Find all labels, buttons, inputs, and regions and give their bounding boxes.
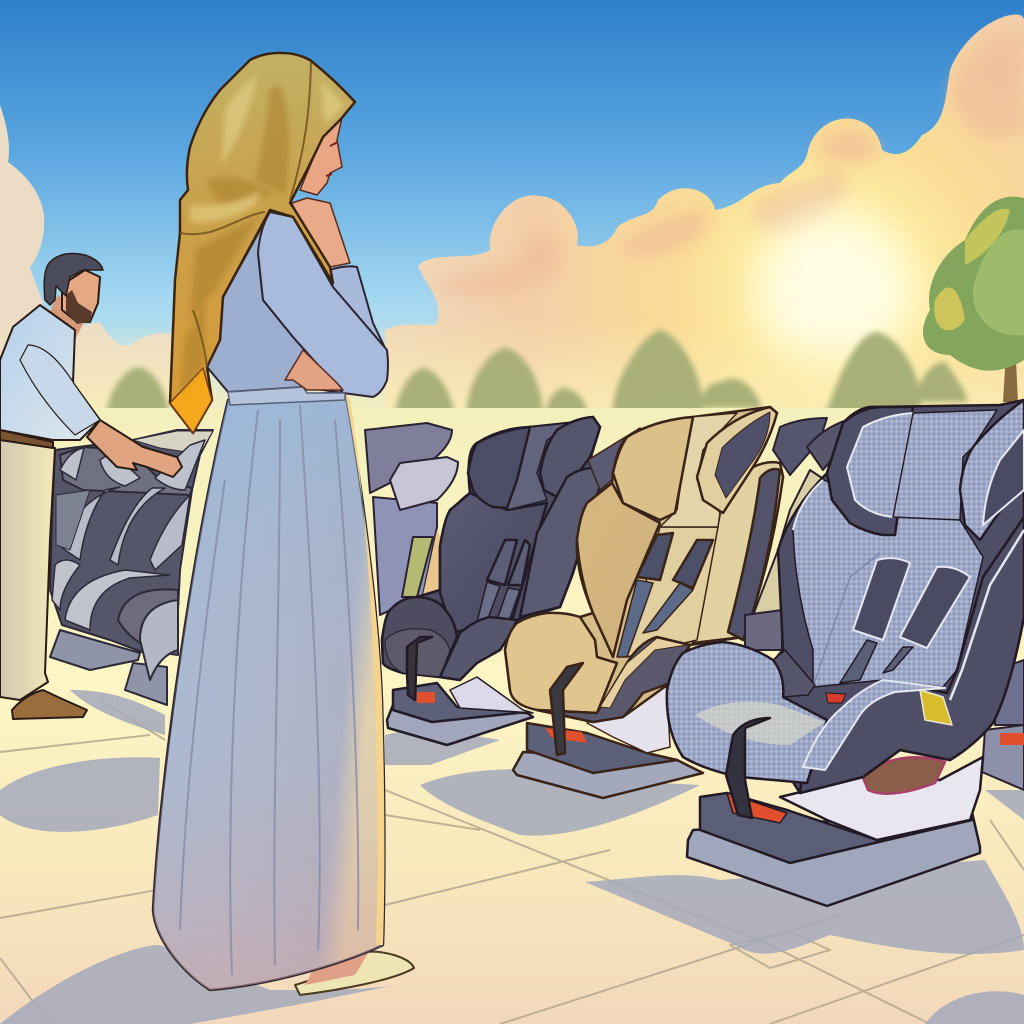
man: hair bbox=[44, 254, 103, 305]
tan seat: left bolster bbox=[577, 483, 660, 657]
man: shirt bbox=[0, 305, 100, 440]
ground bbox=[0, 408, 1024, 1024]
large seat: right bolster bbox=[800, 517, 1024, 793]
woman bbox=[153, 53, 414, 995]
paving lines bbox=[0, 700, 1024, 1024]
woman: raised forearm bbox=[330, 266, 387, 352]
dark seat: shoulder pads bbox=[487, 540, 517, 585]
woman: rim light bbox=[345, 392, 384, 945]
large seat: red panel bbox=[727, 793, 787, 823]
large seat: back fabric base bbox=[793, 480, 983, 687]
large seat: crotch strap bbox=[726, 718, 770, 818]
large seat: thigh bolster bbox=[803, 680, 945, 770]
woman: scarf shading bbox=[180, 85, 289, 395]
large seat: headrest centre bbox=[893, 410, 997, 520]
tan seat: straps bbox=[617, 580, 653, 657]
large seat: undercarriage bbox=[862, 757, 945, 794]
woman: sleeve bbox=[258, 212, 388, 397]
woman: skirt bbox=[153, 392, 384, 990]
tan seat: silhouette bbox=[505, 407, 783, 722]
large seat: wedge bbox=[780, 757, 983, 840]
clouds: sunset bank behind sun bbox=[385, 14, 1024, 430]
dark seat: wedge bbox=[450, 677, 533, 713]
large seat: shell backing bbox=[740, 400, 1024, 793]
left row: middle stripes bbox=[62, 487, 190, 570]
left row: lower stripes bbox=[52, 560, 170, 630]
tan seat: wedge bbox=[587, 687, 670, 753]
woman: eye and lip bbox=[326, 142, 338, 176]
car seat: large foreground bbox=[667, 400, 1024, 906]
woman: shoe bbox=[295, 952, 414, 995]
left row: headrest rolls bbox=[60, 447, 192, 495]
dark seat: headrest wing bbox=[540, 417, 600, 497]
sky bbox=[0, 0, 1024, 430]
tan seat: right bolster dark bbox=[728, 469, 780, 640]
man: beard bbox=[66, 290, 92, 324]
large seat: left shoulder pad bbox=[853, 558, 910, 640]
left row: front base bbox=[125, 663, 167, 705]
sun glow bbox=[755, 210, 915, 370]
large seat: side fabric edge bbox=[793, 480, 823, 530]
man: sleeve fold bbox=[20, 345, 100, 435]
tan seat: base plate bbox=[513, 752, 703, 798]
dark seat: silhouette bbox=[382, 417, 603, 680]
woman: hand under elbow bbox=[285, 350, 343, 390]
clouds: left bank bbox=[0, 105, 175, 430]
dark seat: belt bbox=[407, 637, 432, 700]
tan seat: headrest left bbox=[613, 417, 693, 520]
man: trousers bbox=[0, 438, 55, 700]
tan seat: right bolster outer bbox=[693, 462, 783, 643]
large seat: cushion bbox=[667, 642, 827, 783]
large seat: straps bbox=[840, 640, 877, 683]
large seat: headrest wing bbox=[960, 400, 1024, 540]
woman: face bbox=[300, 113, 343, 195]
woman: dress folds bbox=[180, 405, 358, 975]
dark seat: front bolster bbox=[440, 617, 517, 680]
tan seat: belt bbox=[550, 663, 583, 755]
woman: scarf tip bbox=[170, 368, 212, 433]
distant haze bbox=[0, 320, 1024, 430]
left row: rear base bbox=[50, 630, 140, 670]
tan seat: shoulder pads bbox=[637, 533, 673, 580]
car seat: dark bbox=[382, 417, 603, 745]
large seat: headrest left bbox=[827, 407, 913, 535]
cloud highlights bbox=[430, 32, 1024, 295]
man: shoes bbox=[12, 690, 87, 719]
car seat: behind woman bbox=[365, 423, 458, 615]
man: neck bbox=[48, 295, 85, 340]
tan seat: thigh bolster bbox=[537, 637, 690, 722]
tan seat: headrest wing bbox=[697, 407, 777, 513]
large seat: right shoulder pad bbox=[900, 567, 970, 648]
woman: hand at chin bbox=[292, 198, 350, 267]
large seat: seam bbox=[813, 553, 880, 687]
tan seat: behind headrest bbox=[588, 428, 660, 490]
large seat: warning label bbox=[920, 690, 952, 725]
large seat: side panel bbox=[773, 650, 815, 697]
car seat behind large seat bbox=[745, 417, 1024, 790]
dark seat: headrest left bbox=[468, 427, 530, 508]
dark seat: back bbox=[440, 493, 547, 633]
dark seat: base plate bbox=[387, 705, 533, 745]
man: forearm and hand bbox=[87, 420, 182, 477]
large seat: base body bbox=[700, 793, 972, 863]
left row: body bbox=[50, 430, 213, 655]
distant trees bbox=[106, 330, 968, 434]
tan seat: centre back bbox=[627, 527, 718, 657]
tan seat: headrest centre bbox=[660, 413, 737, 527]
dark seat: cushion bbox=[382, 597, 457, 677]
large seat: cushion highlight bbox=[695, 702, 825, 745]
car seat: tan bbox=[505, 407, 783, 798]
woman: bodice bbox=[207, 212, 343, 393]
tan seat: base body bbox=[527, 723, 677, 773]
woman: headscarf bbox=[170, 53, 355, 433]
ground shadows bbox=[0, 690, 1024, 1024]
large tree at right bbox=[923, 197, 1024, 402]
man: face bbox=[62, 270, 100, 322]
man: belt bbox=[0, 430, 53, 448]
large seat: buckle bbox=[826, 693, 846, 703]
dark seat: base body bbox=[393, 683, 527, 722]
tan seat: cushion bbox=[505, 613, 617, 713]
woman: scarf highlights bbox=[190, 75, 345, 222]
woman: belt bbox=[228, 387, 345, 405]
large seat: base plate bbox=[687, 812, 980, 906]
dark seat: right bolster bbox=[520, 468, 603, 617]
dark seat: headrest centre bbox=[507, 422, 577, 510]
left row: top band bbox=[133, 431, 213, 454]
man at left bbox=[0, 254, 182, 719]
car seats: far left row bbox=[50, 430, 213, 705]
woman: scarf folds bbox=[180, 62, 311, 367]
